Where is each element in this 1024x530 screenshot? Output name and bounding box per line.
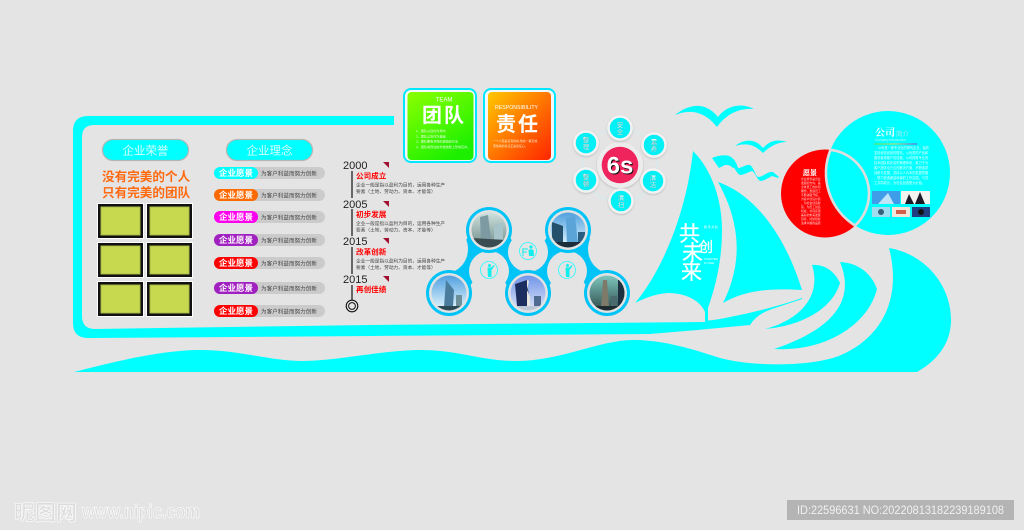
icon: bird large	[675, 106, 754, 127]
company photos	[872, 191, 930, 217]
company circle: 工共同成长，为社会创造更大价值。	[874, 180, 925, 185]
philosophy heading pill	[226, 140, 312, 160]
vision list	[214, 167, 325, 317]
company circle: ，努力营造团结和谐的工作氛围，与员	[874, 175, 928, 180]
responsibility card	[484, 89, 555, 162]
left sail	[635, 151, 722, 312]
vision circle: 企业愿景是企业	[801, 177, 821, 181]
watermark logo	[14, 502, 200, 525]
image id bar: ID:22596631 NO:20220813182239189108	[797, 505, 1004, 517]
overlap outline	[826, 150, 869, 226]
team card: 1、团队以目标为导向	[416, 128, 446, 133]
vision list: 企业愿景	[219, 168, 253, 178]
6s diagram: 安	[617, 120, 624, 129]
6s hub: 6s	[608, 154, 634, 180]
slogan: 来	[681, 261, 702, 284]
company circle: 创新与发展，坚持以人为本的发展思路	[874, 170, 929, 175]
team card: 团队	[422, 104, 466, 127]
company circle: 客户提供全方位的解决方案，不断追求	[874, 165, 929, 170]
timeline: 企业一般是指以盈利为目的，运用各种生产	[356, 220, 445, 227]
responsibility card: 而热情的基点正是责任心。	[493, 143, 528, 148]
right sail	[718, 182, 802, 303]
team card: 3、团队要有共同的规范和方法	[416, 138, 458, 144]
6s diagram: 洁	[650, 180, 657, 189]
breaking wave 1	[765, 265, 840, 329]
timeline: 2005	[343, 199, 367, 211]
6s diagram: 理	[583, 143, 590, 151]
orange slogan	[102, 169, 191, 200]
timeline: 企业一般是指以盈利为目的，运用各种生产	[356, 182, 445, 188]
lower wave	[74, 248, 951, 372]
vision circle: 发展的方向，是	[801, 181, 821, 185]
honors heading pill	[102, 140, 188, 160]
timeline	[343, 160, 445, 312]
timeline: 初步发展	[356, 209, 387, 219]
6s diagram: 清	[650, 173, 657, 182]
vision list: 企业愿景	[219, 190, 253, 200]
philosophy heading pill: 企业理念	[246, 144, 293, 158]
responsibility card: 一个人若是没有热情,他将一事无成,	[493, 138, 538, 143]
honors heading pill: 企业荣誉	[122, 144, 169, 158]
infographic canvas	[15, 88, 1014, 522]
timeline: 要素（土地、劳动力、资本、才能等）	[356, 264, 436, 271]
photo: tower five	[584, 270, 630, 316]
slogan	[679, 223, 718, 284]
vision circle	[781, 150, 869, 238]
team card: 4、团队成员在技术或技能上形成互补。	[416, 144, 470, 149]
6s diagram: 扫	[618, 200, 624, 209]
slogan: 创	[699, 239, 713, 255]
vision circle: 富，为员工创造	[801, 205, 821, 209]
image id bar	[787, 500, 1014, 520]
photo: tower two	[545, 207, 591, 253]
vision list: 企业愿景	[219, 283, 253, 293]
responsibility card: 责任	[496, 113, 540, 136]
vision circle: 愿景	[803, 169, 817, 177]
company circle	[826, 111, 950, 235]
photo: tower four	[505, 270, 551, 316]
vision list: 企业愿景	[219, 212, 253, 222]
vision circle: 全体员工的共同	[801, 185, 821, 189]
icon: person right	[558, 262, 576, 278]
honor frames	[97, 203, 193, 317]
slogan: 携手共创	[704, 224, 718, 229]
vision list: 企业愿景	[219, 235, 253, 245]
6s diagram: 顿	[583, 179, 590, 188]
responsibility card: RESPONSIBILITY	[495, 105, 539, 111]
orange slogan: 只有完美的团队	[102, 185, 191, 200]
timeline: 要素（土地、劳动力、资本、才能等）	[356, 188, 436, 195]
team card	[404, 89, 476, 162]
6s diagram: 素	[651, 137, 658, 146]
watermark logo: www.nipic.com	[81, 502, 200, 523]
vision list: 为客户利益而努力创新	[261, 236, 317, 244]
vision circle: 美好的未来发展	[801, 213, 821, 217]
icon: bird small	[735, 140, 787, 153]
slogan: 共	[679, 223, 700, 246]
venn diagram	[781, 111, 950, 238]
vision circle: ，为社会创造财	[801, 201, 821, 205]
6s diagram: 清	[618, 193, 625, 202]
vision circle: 目标，持续创新	[801, 217, 821, 221]
6s hub: 6s	[607, 152, 633, 180]
breaking wave 2	[774, 262, 877, 349]
timeline: 再创佳绩	[356, 284, 387, 294]
orange slogan: 没有完美的个人	[102, 169, 191, 184]
team card: TEAM	[436, 98, 452, 104]
timeline: 企业一般是指以盈利为目的，运用各种生产	[356, 258, 445, 264]
watermark logo: 昵图网	[14, 502, 77, 525]
company circle: 坚持诚信经营的理念，以优质的产品和	[874, 150, 928, 155]
timeline: 公司成立	[356, 170, 387, 180]
vision circle: 为客户创造价值	[801, 197, 821, 201]
photo: tower three	[426, 270, 472, 316]
cyan frame with hull	[73, 116, 802, 338]
icon: person left	[480, 262, 498, 278]
timeline: 2015	[343, 274, 367, 286]
6s hub	[597, 142, 643, 188]
6s diagram: 养	[651, 144, 658, 153]
company circle: 技术团队和完善的管理体系，致力于为	[874, 160, 928, 165]
vision list: 为客户利益而努力创新	[261, 284, 317, 292]
timeline: 2000	[343, 160, 367, 172]
vision list: 企业愿景	[219, 258, 253, 268]
6s diagram: 整	[583, 135, 590, 144]
6s satellites	[574, 116, 666, 212]
vision list: 为客户利益而努力创新	[261, 308, 317, 316]
company circle: Company introduction	[875, 138, 906, 142]
slogan: TOGETHER	[704, 258, 718, 261]
sailboat	[635, 151, 802, 312]
vision circle: 不断进取开拓，	[801, 193, 821, 197]
vision list: 为客户利益而努力创新	[261, 170, 317, 178]
timeline: 2015	[343, 236, 367, 248]
team card: 2、团队以协作为基础	[416, 134, 446, 138]
vision list: 为客户利益而努力创新	[261, 214, 317, 222]
6s diagram: 全	[617, 127, 624, 136]
vision circle: 追求卓越的品质	[801, 221, 821, 225]
slogan: FUTURE	[704, 262, 714, 265]
icon: desk worker	[520, 242, 536, 260]
vision circle: 理想，激励员工	[801, 189, 821, 193]
company circle: 简介	[896, 129, 910, 138]
company circle: 公司是一家专业化的现代企业，始终	[878, 145, 930, 150]
photo: tower one	[466, 207, 512, 253]
6s diagram: 整	[583, 172, 590, 181]
vision list: 企业愿景	[219, 306, 253, 316]
connectors	[418, 224, 638, 293]
slogan: 未	[682, 242, 703, 265]
building photo network	[418, 207, 638, 316]
6s diagram	[574, 116, 666, 212]
icon: pennant wave	[712, 155, 779, 181]
company circle: 服务赢得客户的信赖，公司拥有专业的	[874, 155, 928, 160]
company circle: 公司	[875, 126, 895, 139]
timeline: 改革创新	[356, 246, 387, 256]
vision list: 为客户利益而努力创新	[261, 192, 317, 200]
vision circle: 机会，共同实现	[801, 209, 821, 213]
vision list: 为客户利益而努力创新	[261, 260, 317, 268]
timeline: 要素（土地、劳动力、资本、才能等）	[356, 226, 436, 234]
